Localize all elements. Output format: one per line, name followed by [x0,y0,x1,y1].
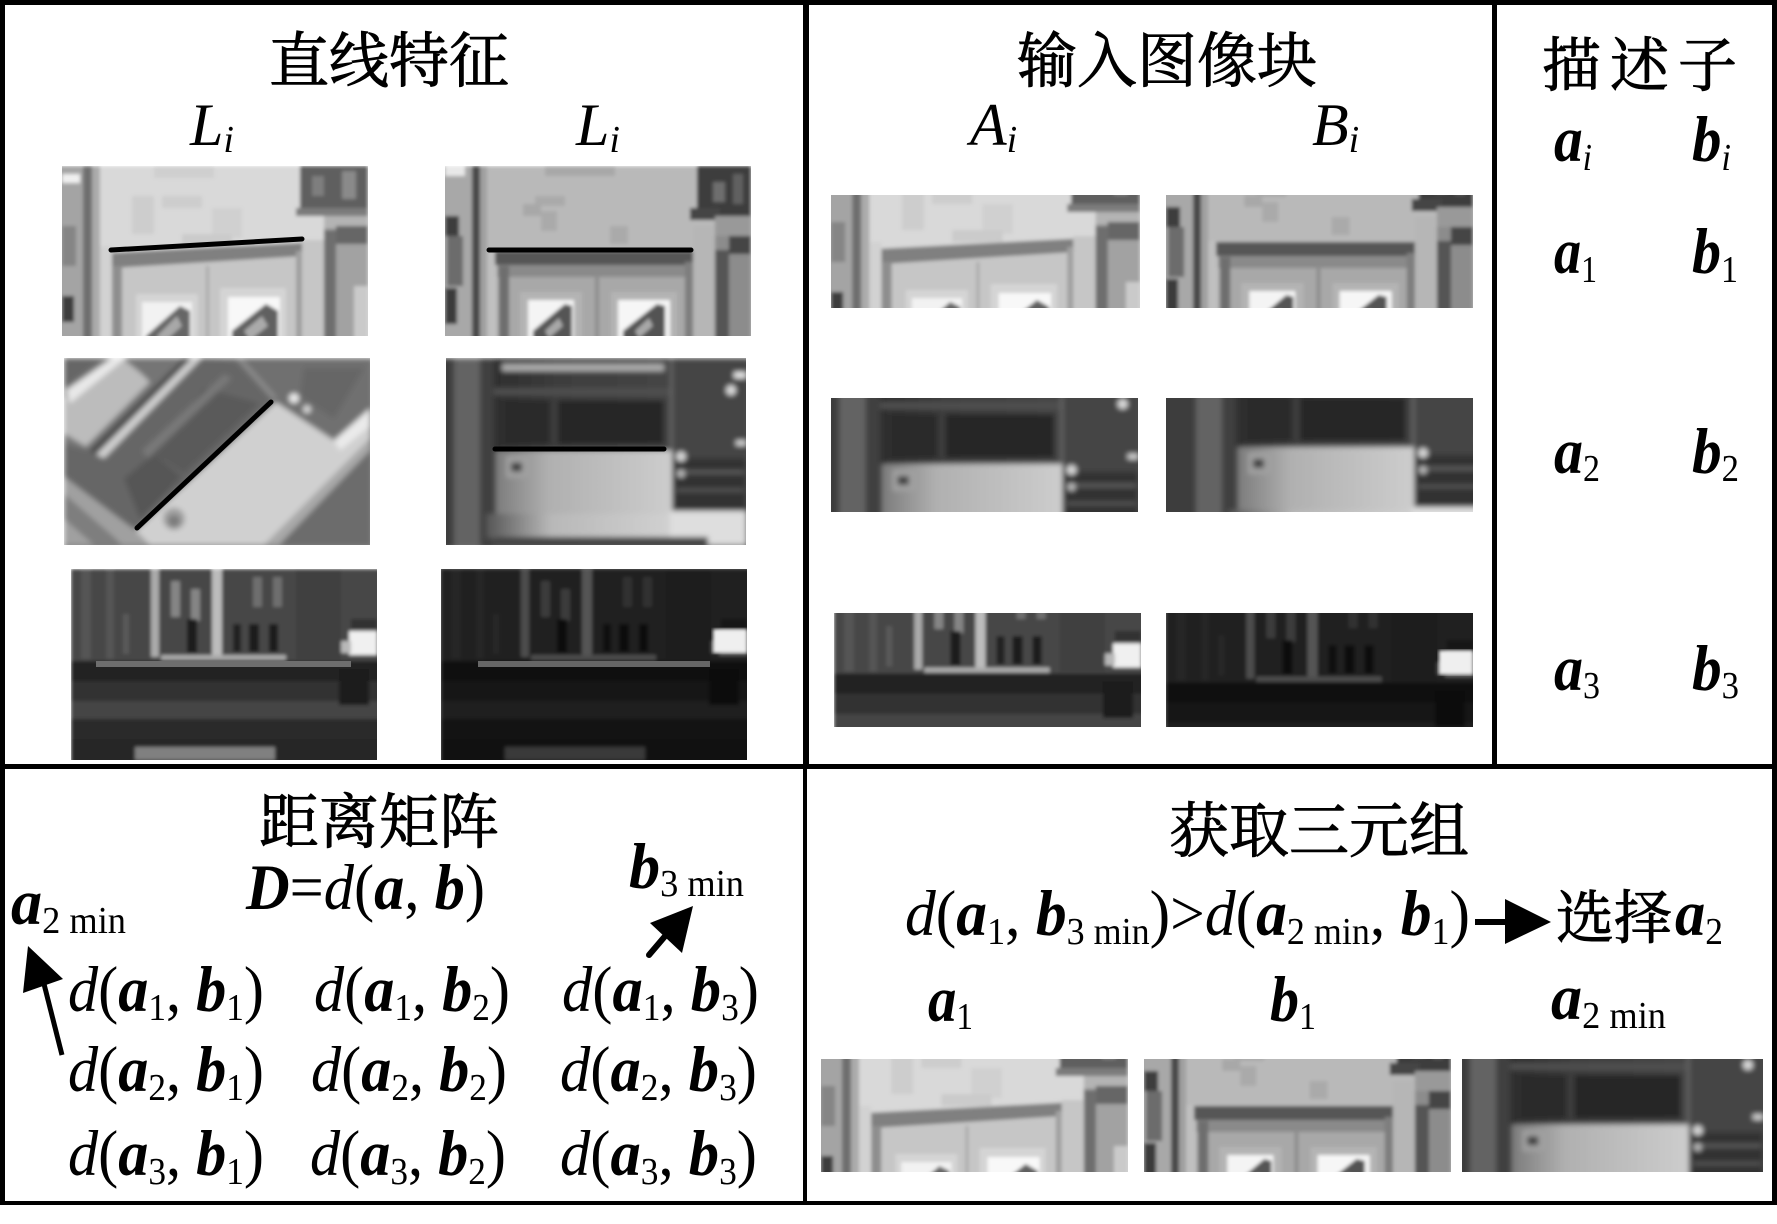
matrix of distances: ) [486,1118,506,1190]
photo: door scene view one with black line [32,166,402,356]
matrix of distances: 1 [226,1151,244,1193]
matrix of distances: d(a [68,1118,151,1190]
formula: triplet selection inequality: 1 [987,911,1005,953]
matrix of distances: , [166,954,196,1026]
label: b_1: b [1692,216,1721,288]
heading: input image patches: 输入图像块 [1017,29,1317,95]
matrix of distances: d(a [560,1034,643,1106]
patch: A2 [831,398,1138,512]
matrix of distances: d(a [68,1034,151,1106]
label: right L_i: i [609,119,620,161]
label: a_3: 3 [1583,665,1600,707]
label: a_2 min: 2 min [1582,995,1666,1037]
label: a_1: a [928,964,956,1036]
formula: D equals d(a, b): D=d(a, b) [245,852,485,924]
matrix of distances: 1 [226,1067,244,1109]
photo: level corridor view with black line [416,358,756,549]
matrix of distances: 1 [148,987,166,1029]
matrix of distances: 3 [719,1067,737,1109]
formula: triplet selection inequality: d(a [905,878,989,950]
heading: obtain triplet: 获取三元组 [1169,799,1469,865]
label: a_2 min: a [1551,962,1582,1034]
patch: A3 [834,613,1141,727]
matrix of distances: 1 [643,987,660,1029]
label: a_2 min: 2 min [42,900,126,942]
symbol: a_2: a [1675,878,1705,950]
matrix of distances: b [691,954,721,1026]
matrix of distances: , [658,1034,689,1106]
label: A_i: A [970,92,1007,158]
patch: triplet b_1 [1144,1059,1451,1172]
label: b_3 min: b [629,831,660,903]
label: b_1: b [1270,964,1299,1036]
label: b_3: 3 [1722,665,1739,707]
label: b_3 min: 3 min [660,863,744,905]
patch: B2 [1166,398,1473,512]
matrix of distances: ) [244,1034,264,1106]
formula: triplet selection inequality: ) [1449,878,1470,950]
matrix of distances: b [196,1034,226,1106]
matrix of distances: b [442,954,472,1026]
photo: dim facade with grey line [71,569,381,764]
arrow: up toward a_2 min [23,946,63,1055]
arrow: leads to selection [1475,899,1551,944]
formula: triplet selection inequality: 3 min [1067,911,1150,953]
matrix of distances: ) [737,1034,757,1106]
label: b_2: b [1692,416,1722,488]
label: b_2: 2 [1722,448,1739,490]
panel: obtain triplet [791,769,1773,1222]
formula: triplet selection inequality: 1 [1431,911,1449,953]
matrix of distances: d(a [68,954,151,1026]
label: right L_i: L [576,92,609,158]
matrix of distances: ) [490,954,510,1026]
matrix of distances: 3 [719,1151,737,1193]
photo: darker facade with grey line [441,569,751,764]
matrix of distances: 2 [468,1151,486,1193]
symbol: a_2: 2 [1705,911,1723,953]
label: a_2 min: a [11,867,42,939]
matrix of distances: d(a [311,1034,394,1106]
label: a_1: a [1554,216,1581,288]
label: a_1: 1 [1581,249,1597,291]
matrix of distances: ) [244,1118,264,1190]
matrix of distances: 3 [390,1151,408,1193]
matrix of distances: ) [739,954,759,1026]
matrix of distances: d(a [310,1118,393,1190]
label: b_1: 1 [1299,996,1316,1038]
text: select a_2: 选择 [1556,886,1672,951]
matrix of distances: , [166,1034,196,1106]
matrix of distances: 2 [391,1067,409,1109]
panel: distance matrix [3,769,805,1203]
formula: triplet selection inequality: d(a [1205,878,1289,950]
label: a_2: a [1554,416,1583,488]
label: b_i: i [1721,137,1731,179]
matrix of distances [68,954,759,1193]
matrix of distances: 2 [148,1067,166,1109]
matrix of distances: d(a [560,1118,643,1190]
panel: descriptors [1497,3,1772,766]
matrix of distances: 1 [226,987,244,1029]
matrix of distances: d(a [562,954,645,1026]
formula: triplet selection inequality: 2 min [1287,911,1370,953]
matrix of distances: 2 [472,987,490,1029]
patch: B1 [1166,195,1473,308]
matrix of distances: b [439,1034,469,1106]
panel: input image patches [800,3,1507,787]
matrix of distances: b [438,1118,468,1190]
matrix of distances: ) [244,954,264,1026]
matrix of distances: ) [737,1118,757,1190]
matrix of distances: b [196,1118,226,1190]
matrix of distances: 1 [394,987,412,1029]
matrix of distances: 3 [148,1151,166,1193]
heading: descriptors: 描述子 [1542,33,1746,99]
matrix of distances: d(a [314,954,397,1026]
formula: triplet selection inequality: b [1401,878,1431,950]
heading: line features: 直线特征 [269,29,509,95]
arrow: up toward b_3 min [649,906,693,955]
formula: triplet selection inequality: b [1036,878,1067,950]
matrix of distances: b [196,954,226,1026]
matrix of distances: , [660,954,691,1026]
heading: distance matrix: 距离矩阵 [259,790,499,856]
photo: door scene view two with black line [415,166,785,356]
label: A_i: i [1007,119,1017,161]
matrix of distances: 3 [641,1151,658,1193]
label: B_i: B [1312,92,1349,158]
formula: triplet selection inequality: )> [1150,878,1205,950]
label: left L_i: L [190,92,223,158]
label: left L_i: i [223,119,234,161]
label: a_i: a [1554,104,1583,176]
matrix of distances: 3 [721,987,739,1029]
label: a_1: 1 [956,996,973,1038]
patch: triplet a_1 [821,1059,1128,1172]
patch: triplet a_2 min [1462,1059,1763,1172]
patch: A1 [831,195,1140,308]
formula: triplet selection inequality: , [1370,878,1401,950]
matrix of distances: , [412,954,442,1026]
matrix of distances: ) [487,1034,507,1106]
label: b_3: b [1692,633,1722,705]
panel: line features [3,3,805,766]
matrix of distances: 2 [641,1067,658,1109]
matrix of distances: , [166,1118,196,1190]
matrix of distances: , [658,1118,689,1190]
matrix of distances: b [689,1034,719,1106]
patch: B3 [1166,613,1473,727]
label: b_1: 1 [1721,249,1738,291]
formula: triplet selection inequality: , [1005,878,1036,950]
matrix of distances: b [689,1118,719,1190]
matrix of distances: , [409,1034,439,1106]
photo: rotated corridor view with black line [64,358,374,549]
label: a_3: a [1554,633,1583,705]
matrix of distances: , [408,1118,438,1190]
matrix of distances: 2 [469,1067,487,1109]
label: b_i: b [1692,104,1721,176]
label: a_i: i [1583,137,1592,179]
label: B_i: i [1349,119,1359,161]
label: a_2: 2 [1583,448,1600,490]
